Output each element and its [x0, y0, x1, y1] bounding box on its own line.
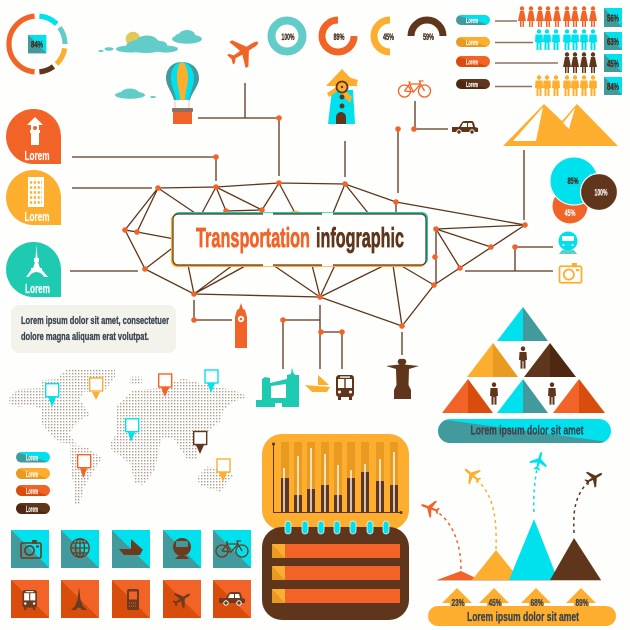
dotted world map [9, 370, 248, 505]
organiser binding rings [285, 521, 389, 534]
teardrop badge: tower [6, 109, 61, 164]
radial chart 59%: 59% [423, 32, 434, 43]
network nodes [122, 115, 528, 335]
radial chart 45%: 45% [383, 32, 394, 43]
icon: tower bridge [256, 367, 299, 407]
percentage boxes: 45% [607, 59, 619, 70]
pyramid caption banner [438, 419, 611, 443]
radial chart 89% [322, 20, 354, 52]
icon: tile airplane [170, 587, 194, 611]
legend pills: Lorem [466, 38, 478, 47]
map pins [46, 370, 230, 482]
percentage boxes [604, 8, 622, 95]
text note panel: Lorem ipsum dolor sit amet, consectetuer [21, 315, 169, 327]
clouds and sun [98, 30, 202, 99]
icon: car [452, 121, 478, 134]
column chart background bars [281, 442, 398, 512]
brown figures row [563, 52, 597, 73]
icon: tile boat [119, 539, 143, 555]
icon: airplane [222, 29, 266, 73]
teardrop badge: tower: Lorem [24, 149, 50, 163]
percentage boxes: 84% [607, 82, 619, 93]
organiser panel: bar chart [262, 434, 409, 530]
triangle pyramid chart [442, 307, 605, 413]
icon: tile camera [21, 541, 41, 558]
title text: infographic [316, 222, 404, 253]
cyan figures row [535, 29, 597, 50]
organiser panel: horizontal bars [262, 527, 409, 620]
icon: christ the redeemer [386, 359, 419, 399]
teardrop badge: building [6, 170, 61, 225]
yellow figures row [535, 75, 597, 96]
percentage arrows: 23% [452, 598, 465, 609]
radial chart 59% [411, 20, 443, 43]
title card [171, 211, 428, 267]
radial chart 89%: 89% [334, 32, 345, 43]
chart axes [272, 442, 402, 514]
flight planes [418, 450, 606, 519]
connector network [70, 83, 553, 369]
map legend pills: Lorem [26, 505, 38, 514]
legend pills: Lorem [466, 80, 478, 89]
overlapping circles chart: 85% [568, 176, 579, 187]
teardrop badge: eiffel tower [6, 242, 61, 297]
people chart [456, 6, 622, 96]
icon: train [558, 232, 578, 254]
teardrop badge: eiffel tower: Lorem [25, 282, 50, 296]
icon tiles row 1 [11, 530, 251, 568]
icon: tile eiffel tower [71, 587, 87, 610]
title text: Transportation [196, 222, 310, 253]
text note panel [11, 305, 176, 353]
percentage arrows: 68% [530, 598, 544, 609]
pyramid figures [490, 346, 556, 405]
teardrop badge: building: Lorem [24, 210, 50, 224]
icon: tile globe [71, 539, 89, 557]
icon tiles row 2 [11, 580, 251, 618]
icon: bus [336, 375, 354, 400]
icon: windmill [326, 69, 358, 124]
icon: big ben [235, 303, 247, 348]
percentage arrows [442, 588, 596, 610]
map legend pills [16, 452, 50, 514]
icon: tile bicycle [216, 541, 248, 557]
icon: tile train [173, 538, 191, 559]
flight triangle chart [418, 450, 606, 580]
icon: tile bus [22, 590, 37, 610]
orange figures row [518, 6, 597, 27]
legend pills: Lorem [466, 16, 478, 25]
overlapping circles chart: 100% [594, 188, 608, 198]
icon: egypt pyramids [503, 104, 618, 146]
radial chart 100%: 100% [282, 32, 295, 43]
icon: tile phone [127, 589, 139, 610]
map legend pills: Lorem [26, 487, 38, 496]
map legend pills: Lorem [26, 454, 38, 462]
legend pills [456, 15, 490, 89]
percentage boxes: 63% [607, 37, 619, 48]
legend pills: Lorem [466, 58, 478, 66]
overlapping circles chart: 45% [564, 208, 576, 219]
percentage arrows: 89% [576, 598, 589, 609]
icon: camera [560, 264, 582, 283]
text note panel: dolore magna aliquam erat volutpat. [21, 331, 149, 343]
column chart white markers [284, 448, 394, 512]
icon: hot air balloon [166, 62, 199, 124]
segmented donut chart 84% [9, 16, 65, 72]
icon: sail boat [305, 375, 330, 392]
percentage arrows: 45% [488, 598, 502, 609]
dashed flight paths [436, 468, 587, 569]
bottom caption banner [428, 606, 616, 626]
radial chart 45% [374, 20, 394, 52]
radial chart 100% [272, 20, 302, 52]
percentage boxes: 56% [607, 14, 619, 24]
icon: tile car [219, 592, 245, 605]
icon: bicycle [398, 81, 430, 97]
map legend pills: Lorem [26, 470, 38, 479]
overlapping circles chart [550, 157, 618, 224]
segmented donut chart 84%: 84% [31, 40, 43, 50]
column chart values [281, 472, 398, 512]
